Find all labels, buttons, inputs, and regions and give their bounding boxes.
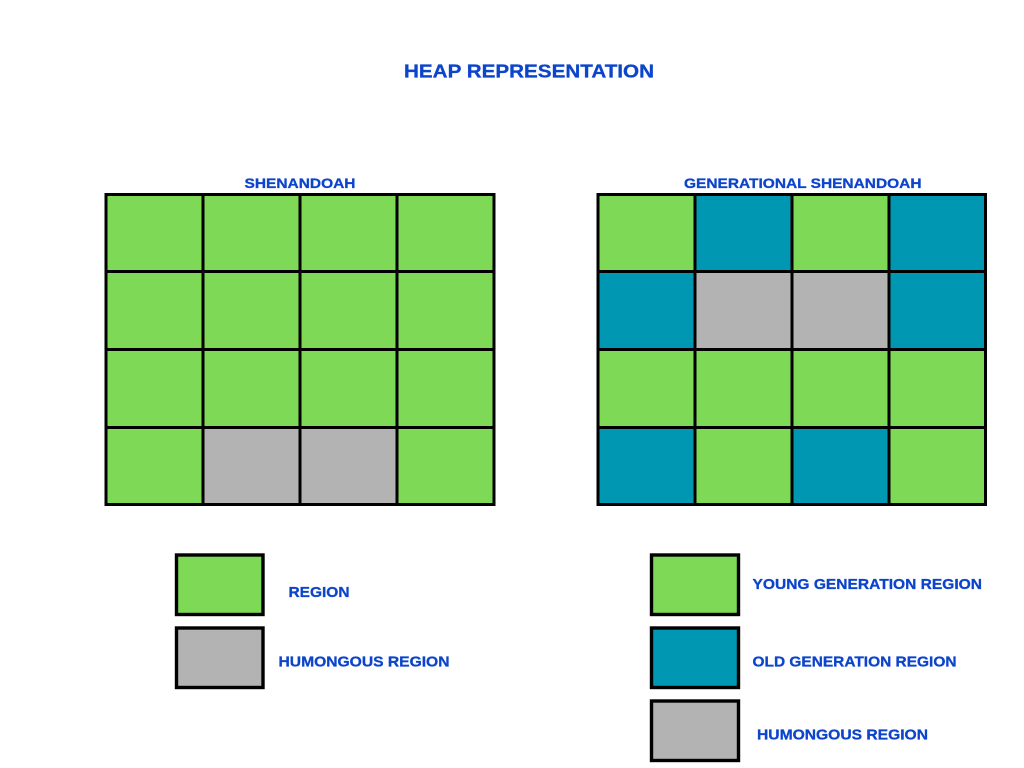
panel: Generational Shenandoah heap (598, 175, 986, 504)
heading: Shenandoah: SHENANDOAH (244, 175, 356, 191)
grid: Shenandoah regions (106, 194, 494, 504)
label: humongous region: HUMONGOUS REGION (757, 728, 928, 744)
swatch: humongous region (652, 701, 738, 760)
swatch: young generation region (652, 555, 738, 614)
label: young generation region: YOUNG GENERATION REGION (752, 577, 982, 593)
label: humongous region: HUMONGOUS REGION (278, 654, 450, 670)
legend: Generational Shenandoah (652, 555, 982, 760)
legend: Shenandoah (176, 555, 450, 688)
label: old generation region: OLD GENERATION REGION (752, 654, 956, 670)
swatch: region (176, 555, 263, 614)
label: region: REGION (288, 585, 350, 601)
grid: Generational Shenandoah regions (598, 194, 986, 504)
swatch: humongous region (176, 628, 263, 688)
swatch: old generation region (652, 628, 738, 688)
panel: Shenandoah heap (106, 175, 494, 504)
heading: Generational Shenandoah: GENERATIONAL SHENANDOAH (684, 175, 922, 191)
title: HEAP REPRESENTATION (404, 60, 654, 82)
